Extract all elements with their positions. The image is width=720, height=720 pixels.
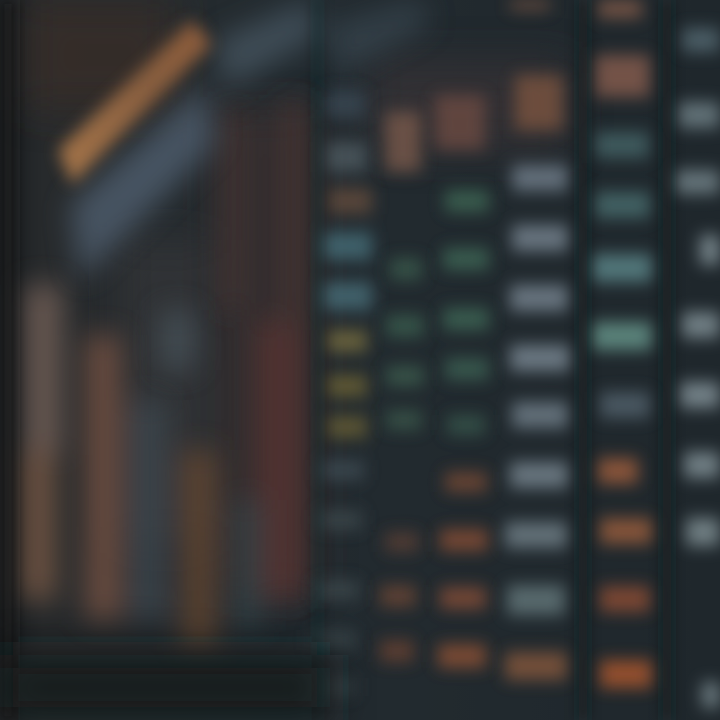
orange diagonal streak (58, 20, 212, 184)
column: green cells (380, 112, 424, 662)
diagonal blue-grey streaks (70, 0, 430, 370)
column: green and orange cells (435, 95, 489, 668)
dark foreground shadow (0, 655, 330, 720)
right edge column: pale cells (675, 28, 720, 708)
warm top-left glow (25, 0, 570, 590)
column: teal and orange cells (592, 0, 652, 688)
column: mixed yellow and teal cells (305, 90, 372, 696)
column: grey cells (505, 0, 570, 680)
left vertical bars (20, 100, 308, 650)
